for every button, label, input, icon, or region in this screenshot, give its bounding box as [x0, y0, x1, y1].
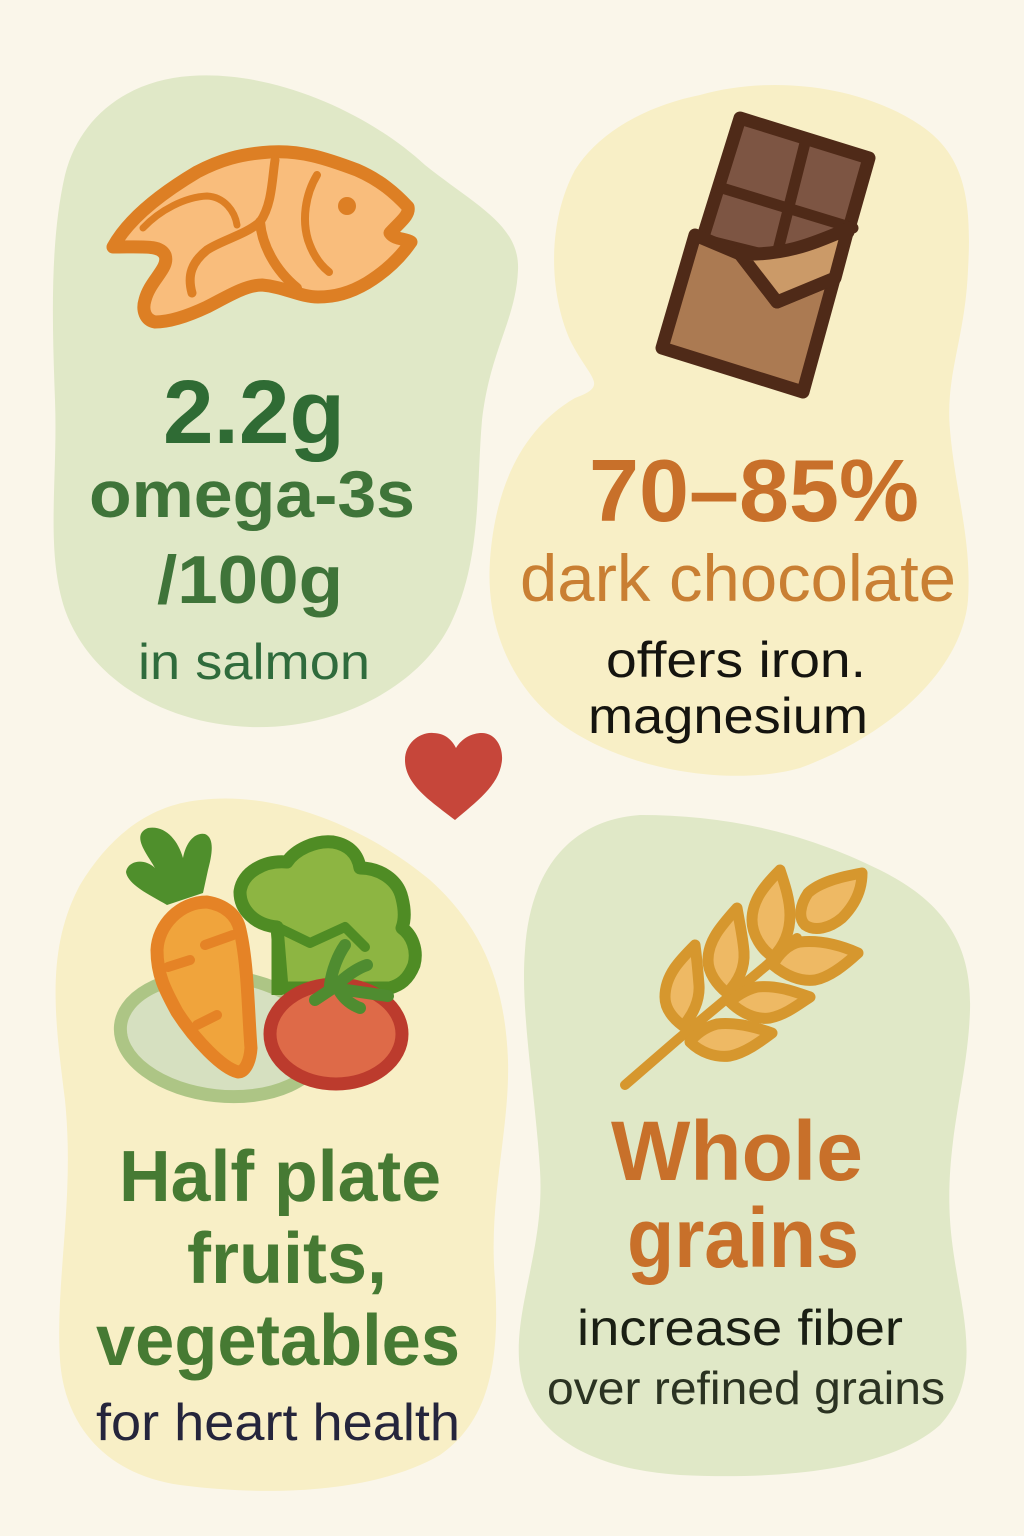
- tomato: [270, 984, 402, 1084]
- label: in salmon: in salmon: [138, 634, 370, 690]
- plate: [114, 966, 330, 1106]
- label: over refined grains: over refined grains: [547, 1362, 945, 1414]
- label: for heart health: for heart health: [96, 1394, 460, 1452]
- carrot: [157, 902, 251, 1072]
- heading: fruits: fruits,: [187, 1219, 387, 1299]
- panel: whole grains: [519, 815, 970, 1476]
- carrot leaves: [126, 828, 212, 905]
- icon: fish: [113, 152, 411, 322]
- icon detail: fish eye: [338, 197, 356, 215]
- label: omega-3s: omega-3s: [89, 457, 415, 531]
- panel: dark chocolate: [489, 85, 969, 776]
- heading: whole: Whole: [611, 1104, 863, 1198]
- icon: heart: [405, 733, 502, 820]
- panel: fruits and vegetables: [56, 798, 508, 1491]
- panel: salmon: [53, 75, 518, 727]
- label: magnesium: magnesium: [588, 688, 868, 744]
- icon: chocolate bar: [662, 118, 869, 392]
- icon: wheat: [625, 870, 862, 1085]
- stat: 2.2g: 2.2g: [163, 363, 345, 463]
- broccoli: [240, 842, 415, 988]
- icon: plate of vegetables: [114, 828, 415, 1106]
- label: per 100g: /100g: [157, 542, 343, 618]
- label: offers iron: offers iron.: [606, 632, 866, 688]
- heading: grains: grains: [627, 1191, 859, 1285]
- label: dark chocolate: dark chocolate: [520, 541, 956, 615]
- label: increase fiber: increase fiber: [577, 1300, 903, 1356]
- heading: vegetables: vegetables: [96, 1301, 460, 1381]
- heading: half plate: Half plate: [119, 1137, 441, 1217]
- stat: 70-85%: 70–85%: [589, 441, 919, 540]
